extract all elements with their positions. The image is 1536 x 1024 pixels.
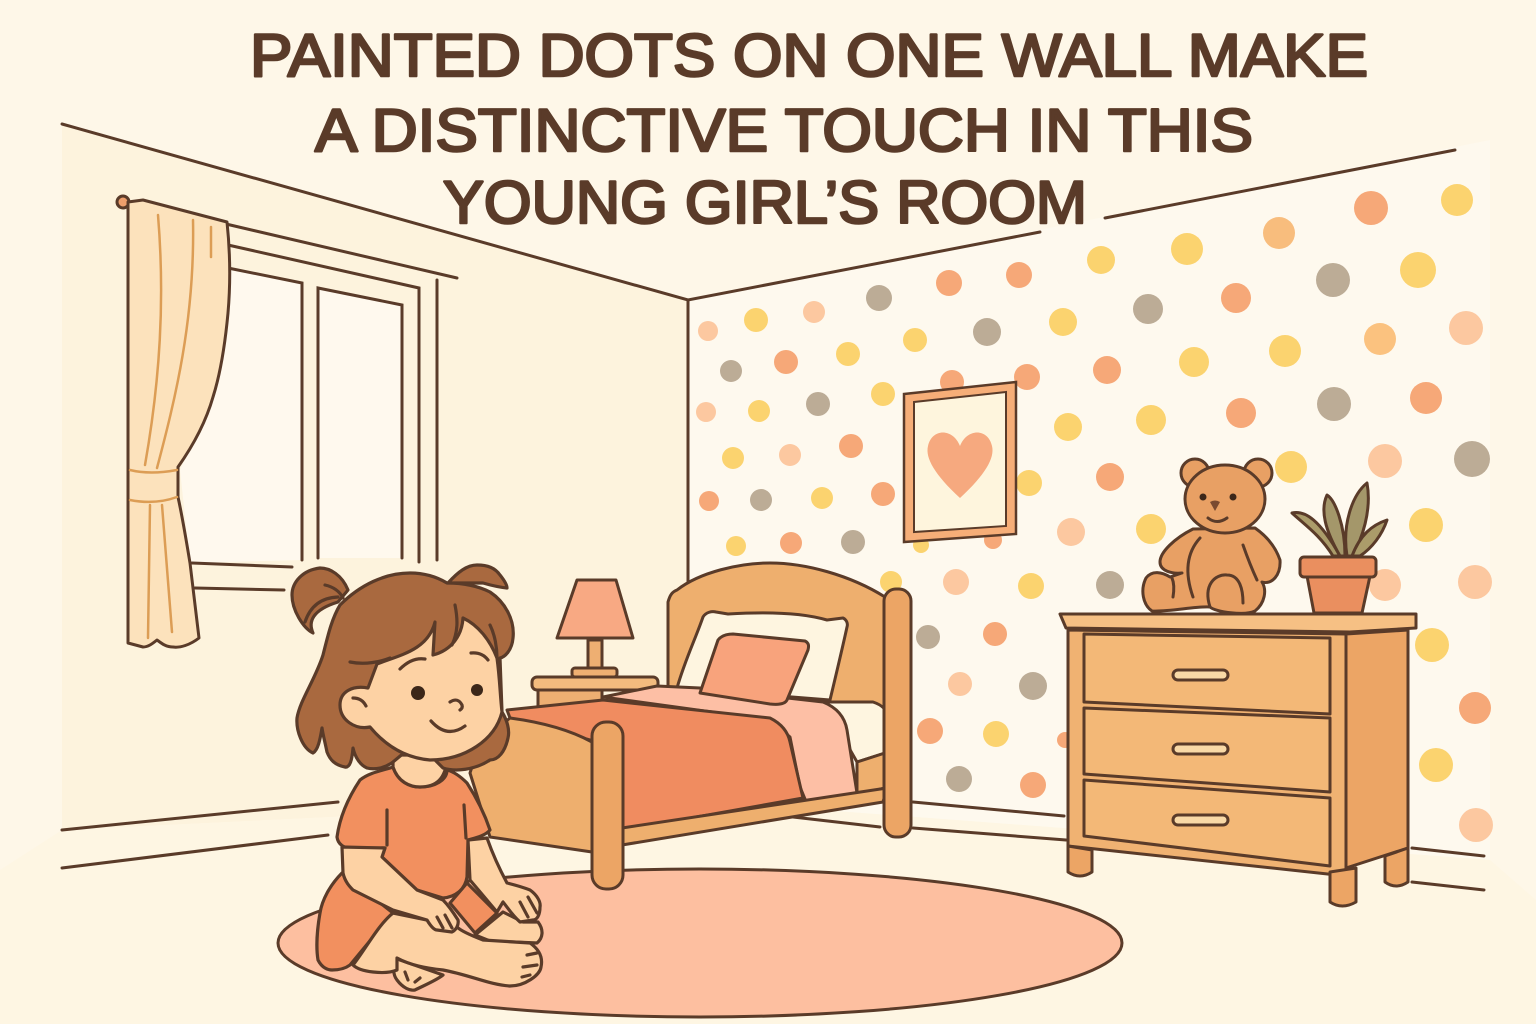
bed xyxy=(470,563,911,889)
title xyxy=(250,22,1368,236)
window xyxy=(180,224,457,590)
left wall xyxy=(62,124,688,830)
dress torso xyxy=(337,767,490,898)
wall outlines xyxy=(62,124,1484,890)
curtain xyxy=(117,196,230,647)
skirt xyxy=(317,873,497,970)
title: PAINTED DOTS ON ONE WALL MAKE xyxy=(250,22,1368,89)
title: YOUNG GIRL’S ROOM xyxy=(443,169,1087,236)
orange blanket xyxy=(507,700,803,830)
salmon pillow xyxy=(700,634,809,704)
right bed post xyxy=(884,589,911,837)
face xyxy=(340,605,502,760)
hair xyxy=(297,573,513,770)
pink sheet xyxy=(603,686,857,804)
mattress xyxy=(823,702,887,762)
rug xyxy=(278,869,1122,1017)
title: A DISTINCTIVE TOUCH IN THIS xyxy=(315,97,1253,164)
girl xyxy=(292,565,542,990)
headboard xyxy=(668,563,885,720)
dresser xyxy=(1060,614,1416,906)
potted plant xyxy=(1292,483,1387,613)
foot bed post xyxy=(592,722,623,889)
teddy bear xyxy=(1143,459,1280,613)
framed heart picture xyxy=(904,382,1016,542)
nightstand and lamp xyxy=(532,580,658,712)
white pillow xyxy=(677,612,847,700)
footboard xyxy=(470,718,592,852)
pigtails xyxy=(292,565,507,633)
right polka dot wall xyxy=(688,140,1493,860)
floor xyxy=(0,800,1536,1024)
arms and hands xyxy=(342,838,540,932)
legs and feet xyxy=(353,912,542,990)
neck xyxy=(393,755,447,787)
side rail xyxy=(622,788,887,845)
